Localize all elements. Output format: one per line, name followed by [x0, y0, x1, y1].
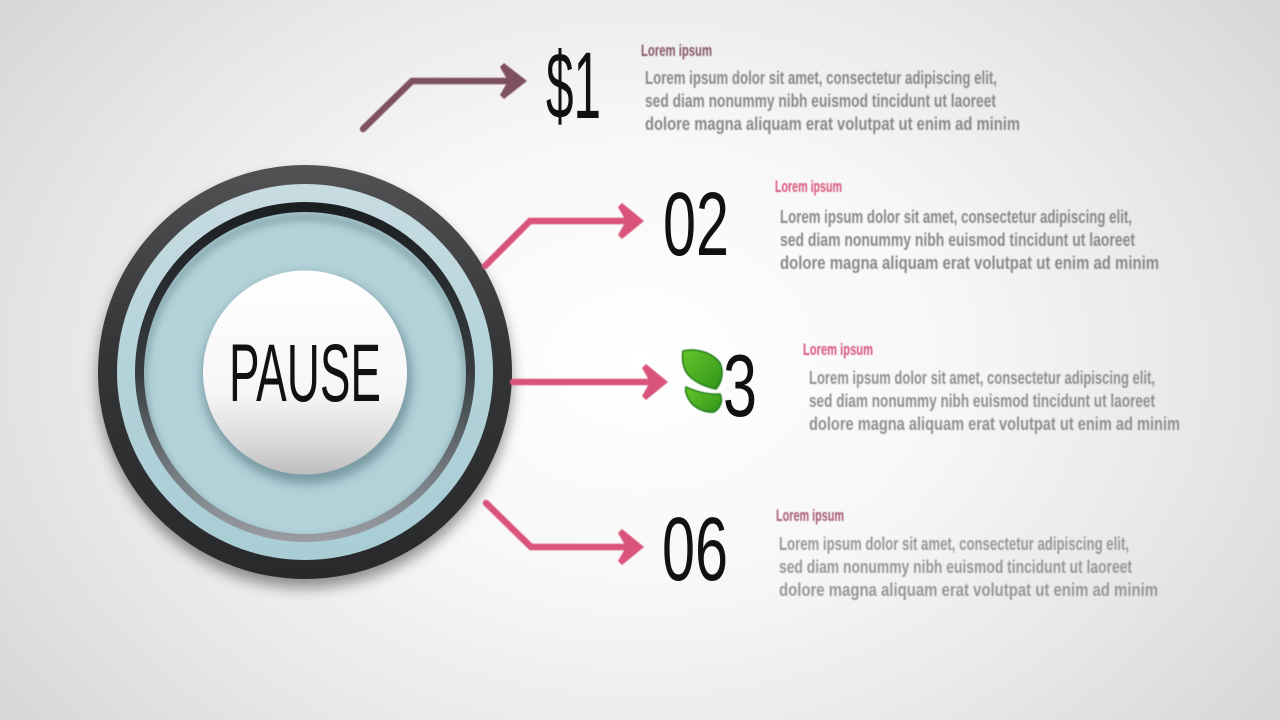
body 3: Lorem ipsum dolor sit amet, consectetur adipiscing elit, [809, 368, 1155, 388]
arrow 4 [486, 503, 644, 565]
heading 1: Lorem ipsum [641, 41, 712, 60]
text block 1 [641, 41, 1020, 134]
central pause dial [98, 165, 512, 588]
disc inner shadow [143, 217, 467, 541]
body 1: Lorem ipsum dolor sit amet, consectetur adipiscing elit, [645, 68, 997, 88]
heading 2: Lorem ipsum [775, 177, 842, 196]
heading 4: Lorem ipsum [776, 506, 844, 525]
dial shadow [98, 174, 512, 588]
text block 3 [803, 340, 1180, 434]
inner metallic ring [135, 202, 475, 542]
body 1 [645, 68, 1020, 134]
body 2: dolore magna aliquam erat volutpat ut enim ad minim [780, 253, 1159, 273]
number: 02: 02 [663, 175, 729, 275]
arrow 1 [363, 63, 527, 129]
body 1: dolore magna aliquam erat volutpat ut enim ad minim [645, 114, 1020, 134]
body 4: dolore magna aliquam erat volutpat ut enim ad minim [779, 580, 1158, 600]
body 3 [809, 368, 1180, 434]
upper leaf [682, 350, 722, 389]
text block 2 [775, 177, 1159, 273]
outer dark ring [98, 165, 512, 579]
body 2: sed diam nonummy nibh euismod tincidunt ut laoreet [780, 230, 1135, 250]
body 3: sed diam nonummy nibh euismod tincidunt ut laoreet [809, 391, 1155, 411]
lower leaf [686, 387, 721, 412]
number: 3: 3 [723, 336, 757, 435]
body 4: Lorem ipsum dolor sit amet, consectetur adipiscing elit, [779, 534, 1129, 554]
arrow 3 [513, 364, 668, 400]
light blue ring [117, 184, 493, 560]
inner blue disc [144, 212, 466, 534]
heading 3: Lorem ipsum [803, 340, 873, 359]
body 3: dolore magna aliquam erat volutpat ut enim ad minim [809, 414, 1180, 434]
white button [203, 270, 407, 474]
body 2 [780, 207, 1159, 273]
button shadow [202, 274, 412, 484]
PAUSE label: PAUSE [229, 328, 381, 419]
text block 4 [776, 506, 1158, 600]
number: 06: 06 [662, 500, 728, 600]
body 2: Lorem ipsum dolor sit amet, consectetur adipiscing elit, [780, 207, 1132, 227]
body 4 [779, 534, 1158, 600]
icon: green leaves [682, 350, 722, 412]
arrow 2 [485, 203, 644, 266]
body 1: sed diam nonummy nibh euismod tincidunt ut laoreet [645, 91, 996, 111]
body 4: sed diam nonummy nibh euismod tincidunt ut laoreet [779, 557, 1132, 577]
number: $1: $1 [546, 33, 601, 139]
